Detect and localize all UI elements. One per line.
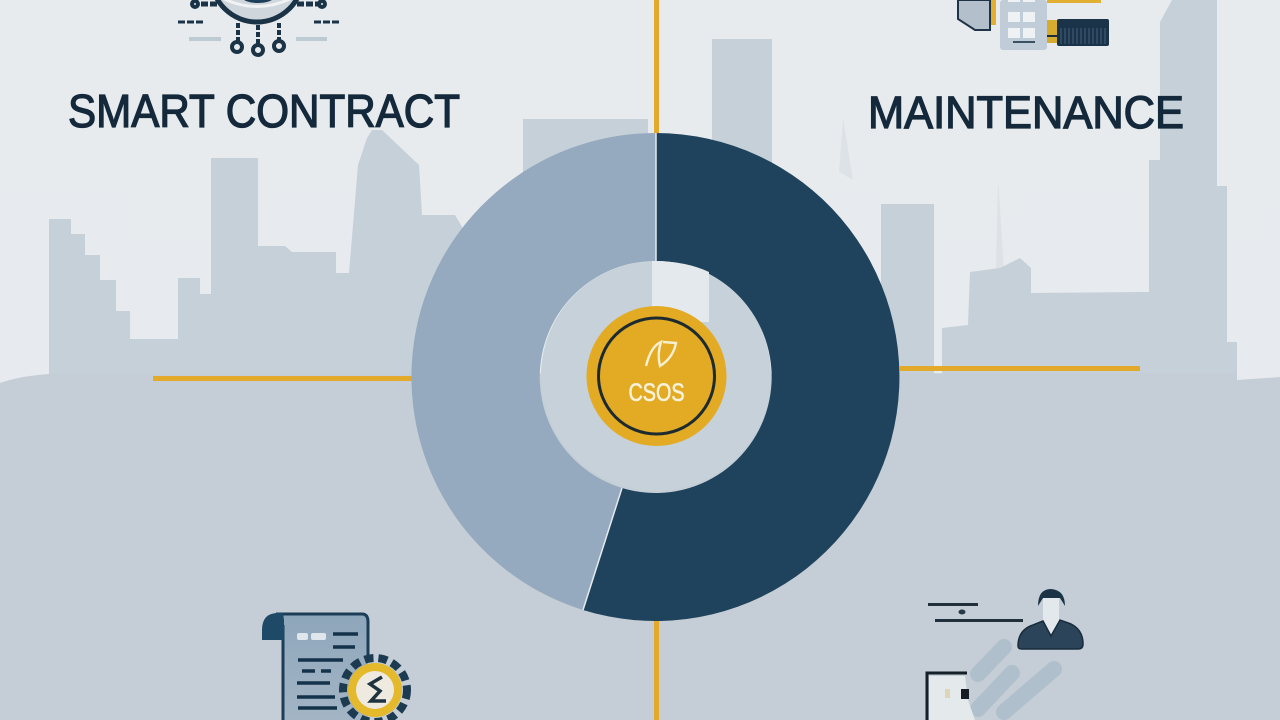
ground band (0, 373, 1280, 720)
gear (343, 658, 407, 720)
icon: blockchain chip (178, 0, 341, 55)
coin label: CSOS (628, 379, 684, 407)
icon: contract scroll with gear (262, 613, 407, 720)
segment: light share (411, 133, 656, 610)
icon: building and machinery (958, 0, 1109, 50)
connector lines (153, 0, 1140, 720)
centre coin (586, 306, 726, 446)
coin glyph (646, 342, 676, 366)
faint antennas (839, 118, 1004, 270)
segment: dark share (583, 133, 899, 621)
donut chart (411, 133, 899, 621)
segment dividers (583, 133, 656, 610)
heading: maintenance: MAINTENANCE (868, 87, 1184, 138)
city skyline silhouette (49, 0, 1237, 390)
icon: technician with laptop (927, 589, 1083, 720)
hole background strip (652, 261, 709, 322)
heading: smart contract: SMART CONTRACT (68, 85, 460, 137)
donut hole (541, 261, 771, 491)
